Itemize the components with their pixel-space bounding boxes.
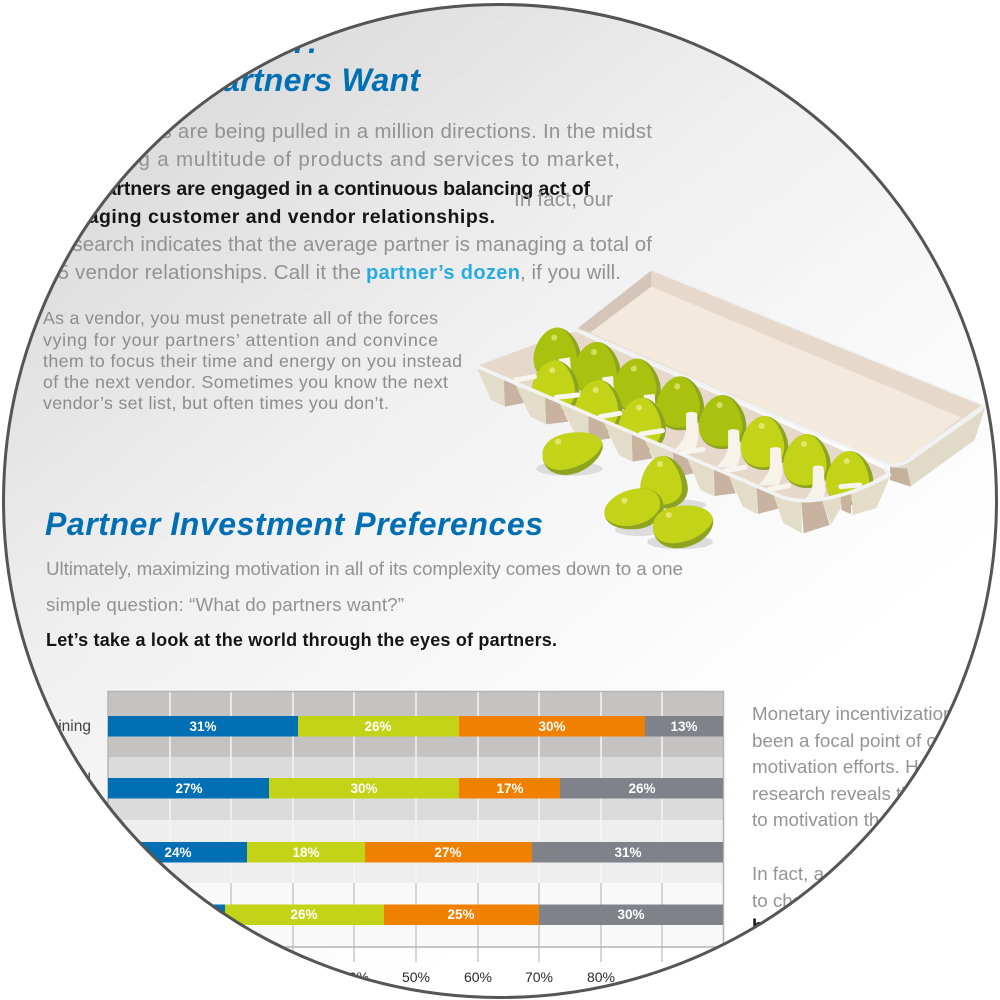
bar row 2: 30% [350, 781, 378, 796]
row labels [59, 720, 90, 778]
intro text block: managing customer and vendor relationships. [46, 206, 495, 228]
bar row 1: 13% [670, 719, 698, 734]
right side text block: b [752, 915, 763, 936]
tray rim and dividers [477, 367, 889, 501]
investment intro text [46, 558, 683, 650]
bar row 2: 17% [496, 781, 524, 796]
back row eggs [534, 328, 873, 505]
x axis labels: 50% [402, 969, 430, 985]
vendor paragraph: vying for your partners’ attention and convince [43, 330, 438, 350]
right side text block [752, 706, 949, 926]
bar row 3: 18% [292, 845, 320, 860]
x axis labels: 60% [464, 969, 492, 985]
front row eggs [532, 360, 666, 452]
group of three loose eggs [604, 456, 713, 549]
bar row 3: 31% [614, 845, 642, 860]
vendor paragraph: of the next vendor. Sometimes you know the next [43, 372, 448, 392]
bar row 4 [213, 904, 723, 925]
vendor paragraph [43, 308, 462, 413]
heading: what partners want [224, 48, 422, 92]
intro text block: Your partners are engaged in a continuous balancing act of [46, 178, 590, 200]
carton tray floor [477, 332, 890, 502]
bar row 4: 25% [447, 907, 475, 922]
x axis labels: 90% [648, 969, 676, 985]
intro text block: , if you will. [520, 261, 621, 284]
heading: what partners want: What Partners Want [112, 62, 421, 98]
x axis labels: 30% [279, 969, 307, 985]
vendor paragraph: vendor’s set list, but often times you don’t. [43, 393, 389, 413]
carton posts [559, 357, 825, 504]
intro text block: Research indicates that the average partner is managing a total of [46, 233, 652, 256]
x axis labels: 40% [341, 969, 369, 985]
intro text block: Your partners are being pulled in a million directions. In the midst [46, 120, 652, 143]
row labels: Technical [26, 771, 91, 788]
intro text block: 15 vendor relationships. Call it the [46, 261, 361, 284]
bar row 1 [108, 716, 723, 736]
heading: partner investment preferences: Partner Investment Preferences [45, 506, 543, 542]
bar row 1: 26% [364, 719, 392, 734]
carton lid [575, 268, 986, 487]
x axis labels [351, 972, 650, 982]
vendor paragraph: them to focus their time and energy on you instead [43, 351, 462, 371]
bar row 3: 27% [434, 845, 462, 860]
chart grid lines [108, 691, 724, 962]
right side text block: been a focal point of our [752, 730, 954, 751]
bar row 2 [108, 778, 723, 798]
stacked bar chart [0, 691, 724, 985]
front cups [477, 367, 890, 533]
bar row 4: 26% [290, 907, 318, 922]
bar row 1: 30% [538, 719, 566, 734]
right side text block: to change [752, 890, 834, 911]
loose egg left [536, 432, 603, 476]
bar row 2: 26% [628, 781, 656, 796]
heading: what partners want: Motivation Factor: [28, 24, 318, 60]
illustration: egg carton with green eggs [477, 268, 986, 549]
chart bands [108, 692, 723, 883]
vendor paragraph: As a vendor, you must penetrate all of the forces [43, 308, 438, 328]
intro text block: In fact, our [514, 188, 613, 211]
investment intro text: simple question: “What do partners want?” [46, 594, 404, 615]
right side text block: In fact, a survey of partners [752, 863, 980, 884]
bar row 2: 27% [175, 781, 203, 796]
x axis labels: 80% [587, 969, 615, 985]
bar row 1: 31% [189, 719, 217, 734]
bar row 4: 30% [617, 907, 645, 922]
right side text block: Monetary incentivization has [752, 703, 989, 724]
right side text block: to motivation than money. [752, 809, 966, 830]
intro text block: of bringing a multitude of products and services to market, [46, 148, 620, 171]
bar row 3: 24% [164, 845, 192, 860]
bar row 3 [108, 842, 723, 862]
background gradient [5, 6, 926, 802]
intro text block: partner’s dozen [366, 262, 520, 284]
x axis labels: 70% [525, 969, 553, 985]
investment intro text: Let’s take a look at the world through the eyes of partners. [46, 630, 557, 650]
investment intro text: Ultimately, maximizing motivation in all of its complexity comes down to a one [46, 558, 683, 579]
intro text block [46, 120, 652, 284]
